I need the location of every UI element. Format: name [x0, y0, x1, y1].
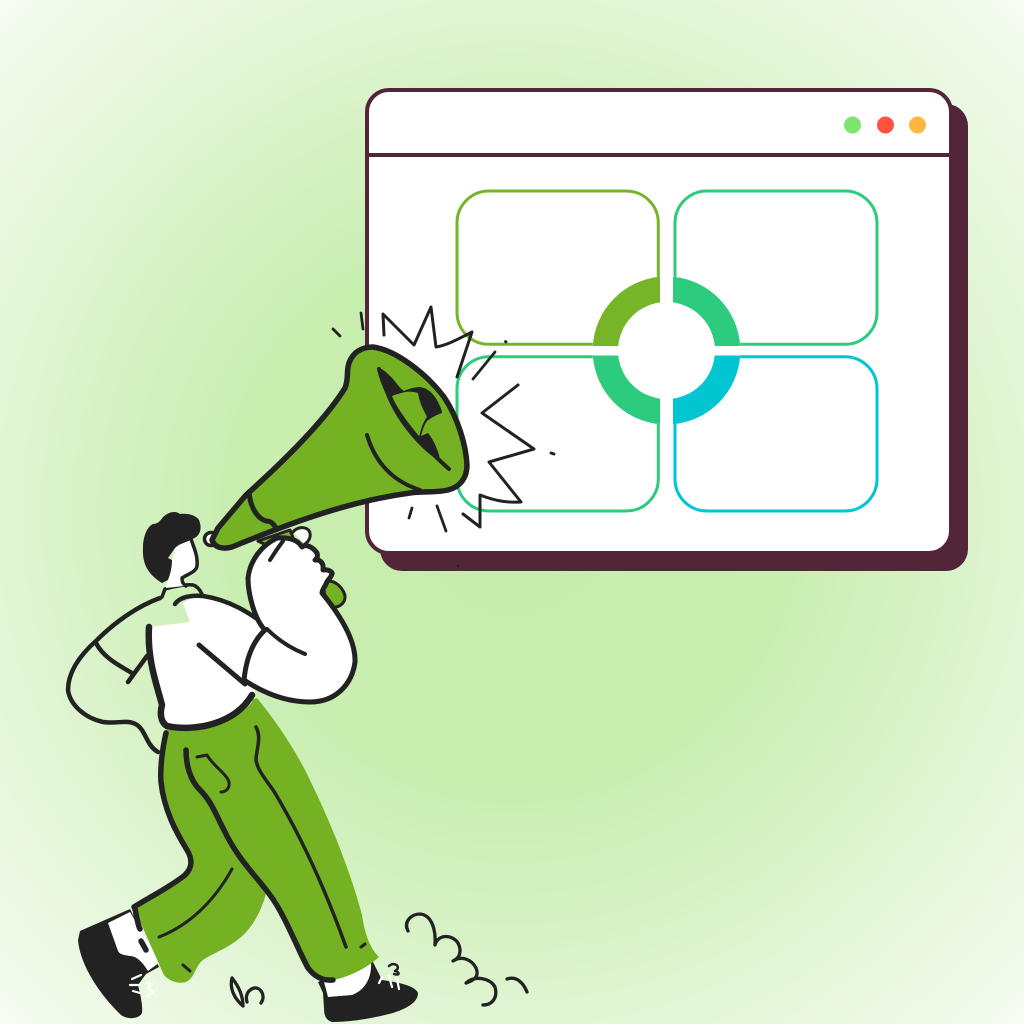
window frame — [367, 90, 951, 553]
megaphone body — [212, 347, 467, 548]
forearm and finger lines — [267, 541, 305, 654]
pants — [135, 698, 379, 983]
handle stem — [258, 530, 294, 548]
megaphone tail ring — [204, 532, 218, 546]
megaphone collar — [249, 492, 276, 528]
center ring — [592, 276, 740, 424]
person: left arm outline — [68, 598, 160, 752]
shirt outlines — [149, 585, 268, 728]
lower horn curve — [367, 435, 420, 490]
sound burst: right — [463, 385, 534, 527]
handle ring — [293, 528, 310, 544]
inside of the horn — [378, 368, 442, 463]
horn rim — [379, 369, 449, 469]
small dot on window — [457, 565, 459, 567]
window control dots — [844, 116, 926, 134]
front shoe — [318, 962, 418, 1022]
shirt — [149, 593, 275, 730]
pants outlines — [134, 727, 365, 980]
hand and forearm — [244, 538, 355, 702]
laces — [130, 975, 141, 993]
empty content box: bottom left — [457, 357, 658, 511]
handle tip — [324, 581, 345, 607]
sock — [323, 962, 371, 997]
sound burst: top — [383, 307, 472, 377]
shoe mark — [146, 983, 153, 996]
shoe mark — [389, 964, 399, 975]
inner left arm — [96, 643, 147, 682]
hair — [143, 512, 201, 583]
sock — [108, 912, 160, 971]
panel: browser window — [367, 90, 968, 571]
laces — [379, 976, 399, 989]
sound ticks — [333, 313, 554, 531]
empty content box: top left — [457, 191, 658, 344]
title bar divider — [367, 153, 951, 157]
empty content box: bottom right — [675, 357, 877, 511]
horn reflection — [392, 392, 427, 437]
megaphone — [204, 347, 467, 607]
empty content box: top right — [675, 191, 877, 344]
motion squiggles — [231, 914, 527, 1006]
face and neck — [166, 537, 198, 588]
back shoe — [78, 909, 160, 1018]
window shadow — [380, 104, 968, 571]
